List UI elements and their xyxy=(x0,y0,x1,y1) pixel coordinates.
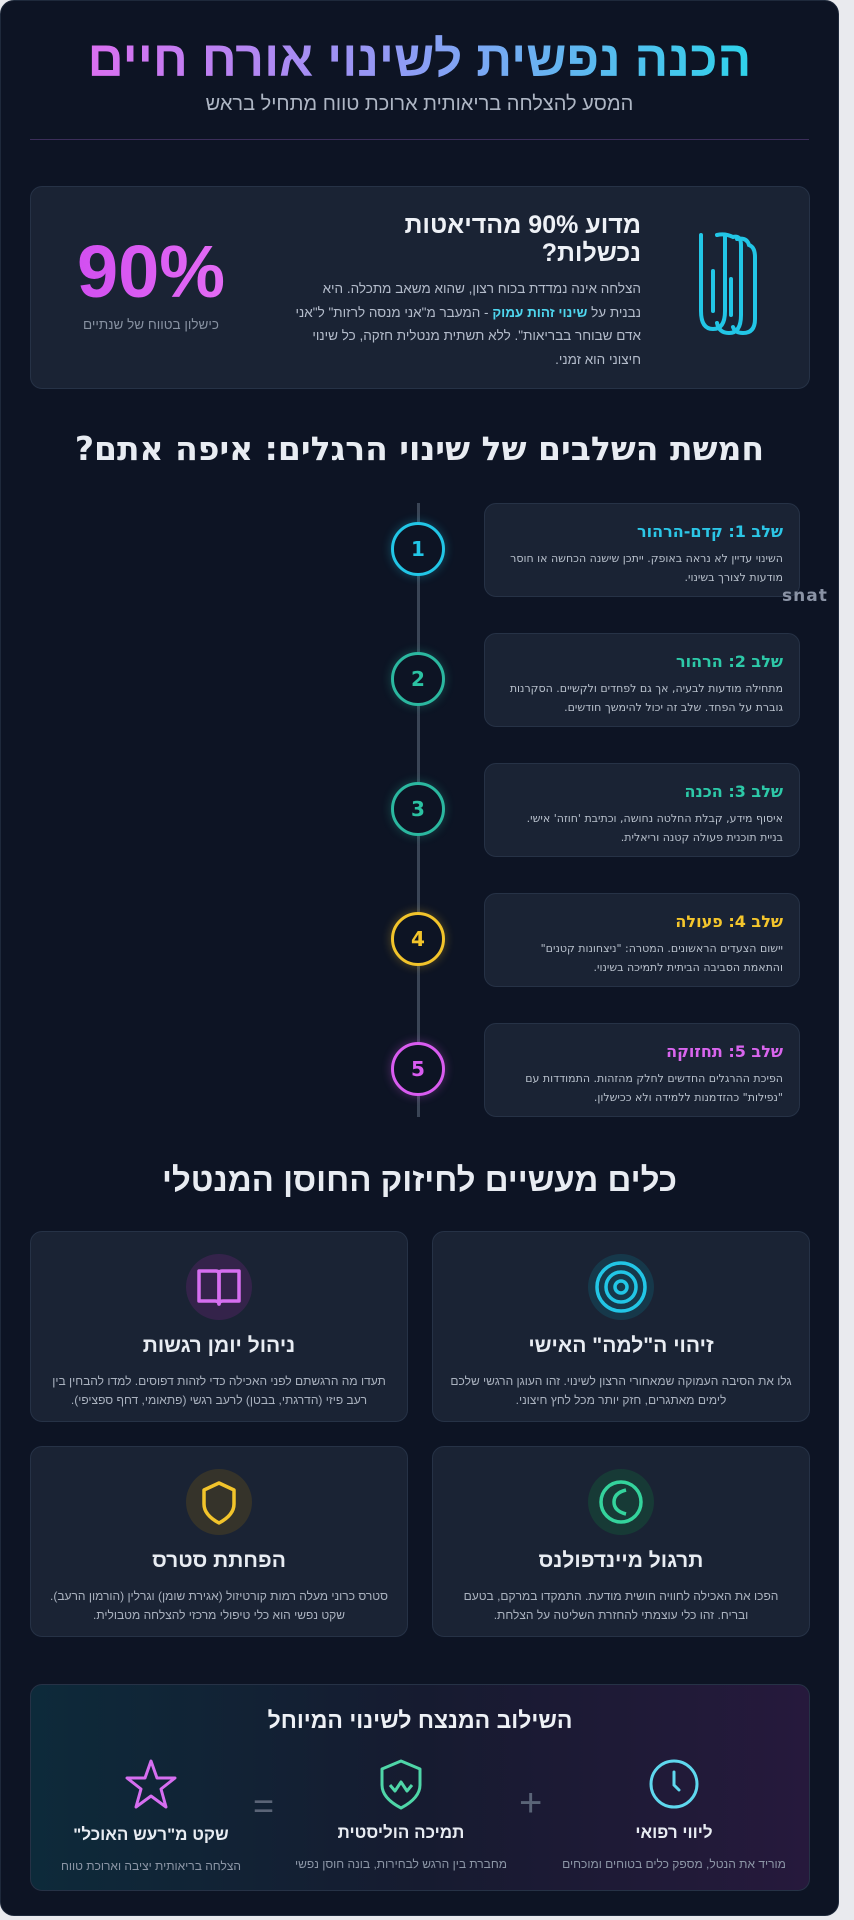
tool: journal: רעב פיזי (הדרגתי, בבטן) לרעב רגשי (פתאומי, דחף ספציפי). xyxy=(71,1393,367,1407)
icon: moon circle xyxy=(588,1469,654,1535)
timeline line xyxy=(417,503,420,1117)
tool: mindfulness xyxy=(432,1446,810,1637)
step 2: מתחילה מודעות לבעיה, אך גם לפחדים ולקשיים. הסקרנות גוברת על הפחד. שלב זה יכול להימשך חודשים. xyxy=(510,682,783,714)
item: medical xyxy=(562,1760,786,1871)
watermark: snat xyxy=(782,586,828,606)
icon: target xyxy=(588,1254,654,1320)
step 1: השינוי עדיין לא נראה באופק. ייתכן שישנה הכחשה או חוסר מודעות לצורך בשינוי. xyxy=(510,552,783,584)
icon: plus: + xyxy=(519,1781,542,1825)
heading: מדוע 90% מהדיאטות נכשלות? xyxy=(404,211,641,267)
step 4 xyxy=(386,893,800,987)
item: medical: ליווי רפואי xyxy=(635,1823,713,1842)
step 4: יישום הצעדים הראשונים. המטרה: "ניצחונות קטנים" xyxy=(541,942,783,955)
tool: stress xyxy=(30,1446,408,1637)
tool: why: זיהוי ה"למה" האישי xyxy=(528,1334,714,1357)
tool: why xyxy=(432,1231,810,1422)
heading: stages: חמשת השלבים של שינוי הרגלים: איפה אתם? xyxy=(75,429,764,468)
step 3 xyxy=(387,763,800,857)
step 1: 1 xyxy=(411,537,425,561)
tool: stress: שקט נפשי הוא כלי טיפולי מרכזי להצלחה מטבולית. xyxy=(93,1608,345,1622)
step 3: בניית תוכנית פעולה קטנה וריאלית. xyxy=(621,830,783,844)
step 2 xyxy=(387,633,800,727)
item: calm: שקט מ"רעש האוכל" xyxy=(73,1825,229,1844)
icon: book xyxy=(186,1254,252,1320)
item: holistic xyxy=(295,1760,507,1871)
icon: brain xyxy=(699,232,757,335)
icon: shield xyxy=(186,1469,252,1535)
step 1 xyxy=(386,503,800,597)
heading: tools: כלים מעשיים לחיזוק החוסן המנטלי xyxy=(162,1161,677,1198)
tool: journal: תעדו מה הרגשתם לפני האכילה כדי לזהות דפוסים. למדו להבחין בין xyxy=(52,1374,386,1388)
tool: why: לימים מאתגרים, חזק יותר מכל לחץ חיצוני. xyxy=(516,1393,726,1407)
step 3: שלב 3: הכנה xyxy=(684,782,783,801)
tool: journal: ניהול יומן רגשות xyxy=(143,1334,295,1357)
timeline xyxy=(386,503,800,1117)
paragraph: הצלחה אינה נמדדת בכוח רצון, שהוא משאב מתכלה. היא נבנית על שינוי זהות עמוק - המעבר מ"אני מנסה לרזות" ל"אני אדם שבוחר בבריאות". ללא תשתית מנטלית חזקה, כל שינוי חיצוני הוא זמני. xyxy=(296,281,641,366)
step 5: שלב 5: תחזוקה xyxy=(666,1042,783,1061)
stat 90%: כישלון בטווח של שנתיים xyxy=(83,317,219,332)
step 3: 3 xyxy=(411,797,425,821)
tool: stress: סטרס כרוני מעלה רמות קורטיזול (אגירת שומן) וגרלין (הורמון הרעב). xyxy=(50,1589,388,1603)
tool: mindfulness: ובריח. זהו כלי עוצמתי להחזרת השליטה על הצלחת. xyxy=(494,1608,748,1622)
tool: journal xyxy=(30,1231,408,1422)
step 5 xyxy=(386,1023,800,1117)
item: calm: הצלחה בריאותית יציבה וארוכת טווח xyxy=(61,1859,241,1873)
panel: combination xyxy=(30,1684,810,1891)
step 4: 4 xyxy=(411,927,425,951)
subtitle: המסע להצלחה בריאותית ארוכת טווח מתחיל בראש xyxy=(206,93,633,115)
step 1: שלב 1: קדם-הרהור xyxy=(637,522,783,541)
step 4: והתאמת הסביבה הביתית לתמיכה בשינוי. xyxy=(594,960,783,974)
step 3: איסוף מידע, קבלת החלטה נחושה, וכתיבת 'חוזה' אישי. xyxy=(527,812,783,825)
step 2: שלב 2: הרהור xyxy=(676,652,783,671)
tool: why: גלו את הסיבה העמוקה שמאחורי הרצון לשינוי. זהו העוגן הרגשי שלכם xyxy=(450,1374,792,1388)
panel: intro 90% xyxy=(30,186,810,389)
step 4: שלב 4: פעולה xyxy=(675,912,783,931)
step 2: 2 xyxy=(411,667,425,691)
item: calm xyxy=(61,1760,241,1873)
step 5: הפיכת ההרגלים החדשים לחלק מהזהות. התמודדות עם "נפילות" כהזדמנות ללמידה ולא ככישלון. xyxy=(525,1072,783,1104)
tool: mindfulness: תרגול מיינדפולנס xyxy=(539,1549,703,1572)
title: הכנה נפשית לשינוי אורח חיים xyxy=(88,31,751,87)
step 5: 5 xyxy=(411,1057,425,1081)
icon: equals: = xyxy=(253,1785,274,1826)
stat 90%: 90% xyxy=(77,230,225,313)
tool: mindfulness: הפכו את האכילה לחוויה חושית מודעת. התמקדו במרקם, בטעם xyxy=(464,1589,778,1603)
combination title: השילוב המנצח לשינוי המיוחל xyxy=(268,1707,572,1733)
item: holistic: תמיכה הוליסטית xyxy=(338,1823,464,1842)
item: medical: מוריד את הנטל, מספק כלים בטוחים ומוכחים xyxy=(562,1857,786,1871)
tool: stress: הפחתת סטרס xyxy=(152,1549,286,1572)
item: holistic: מחברת בין הרגש לבחירות, בונה חוסן נפשי xyxy=(295,1857,507,1871)
